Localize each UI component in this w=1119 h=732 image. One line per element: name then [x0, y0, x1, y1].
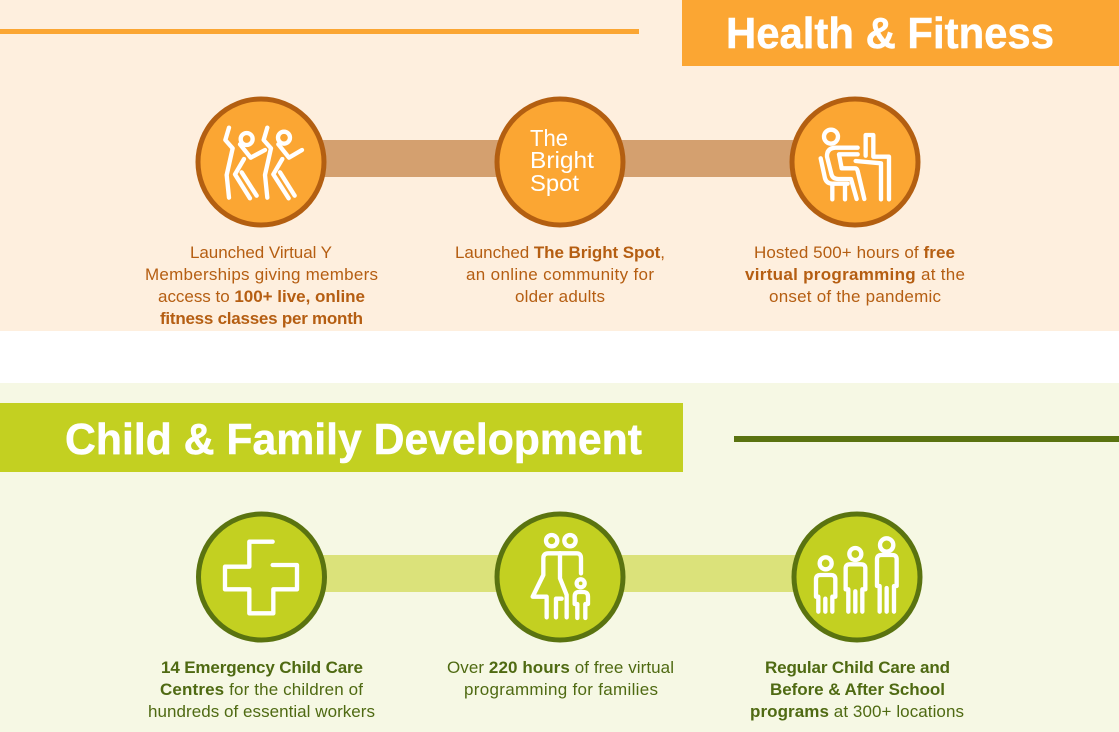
- text: regular child care: Before & After School: [770, 680, 945, 699]
- text: emergency child care centres: Centres for the children of: [160, 680, 363, 699]
- text: virtual programming hours: virtual programming at the: [745, 265, 965, 284]
- text: emergency child care centres: hundreds of essential workers: [148, 702, 375, 721]
- icon: the bright spot logo: The: [530, 125, 568, 151]
- icon: the bright spot logo: Bright: [530, 147, 595, 173]
- icon: medical cross: [198, 514, 324, 640]
- icon: dancers: [198, 99, 324, 225]
- text: regular child care: [750, 658, 964, 721]
- heading: child and family development: Child & Family Development: [65, 415, 642, 464]
- connector bar: [320, 555, 800, 592]
- text: emergency child care centres: [148, 658, 375, 721]
- panel: health and fitness: [0, 0, 1119, 331]
- text: virtual y memberships: [145, 243, 378, 328]
- text: virtual y memberships: Memberships giving members: [145, 265, 378, 284]
- text: the bright spot: an online community for: [466, 265, 654, 284]
- connector bar: [320, 140, 800, 177]
- icon: three people: [794, 514, 920, 640]
- text: virtual y memberships: fitness classes per month: [160, 309, 363, 328]
- icon: family: [497, 514, 623, 640]
- icon: the bright spot logo: [497, 99, 623, 225]
- heading: child and family development: [0, 403, 683, 472]
- text: the bright spot: [455, 243, 665, 306]
- text: virtual y memberships: Launched Virtual Y: [190, 243, 332, 262]
- heading: health and fitness: [682, 0, 1119, 66]
- text: the bright spot: older adults: [515, 287, 605, 306]
- heading: health and fitness: Health & Fitness: [726, 9, 1054, 58]
- text: virtual programming hours: Hosted 500+ hours of free: [754, 243, 955, 262]
- text: programming for families: [447, 658, 674, 699]
- text: virtual programming hours: onset of the pandemic: [769, 287, 942, 306]
- text: emergency child care centres: 14 Emergency Child Care: [161, 658, 363, 677]
- text: regular child care: programs at 300+ locations: [750, 702, 964, 721]
- text: the bright spot: Launched The Bright Spot,: [455, 243, 665, 262]
- text: programming for families: Over 220 hours of free virtual: [447, 658, 674, 677]
- text: virtual y memberships: access to 100+ live, online: [158, 287, 365, 306]
- panel: child and family development: [0, 383, 1119, 732]
- text: programming for families: programming for families: [464, 680, 658, 699]
- icon: person at desk: [792, 99, 918, 225]
- text: virtual programming hours: [745, 243, 965, 306]
- icon: the bright spot logo: Spot: [530, 170, 580, 196]
- text: regular child care: Regular Child Care and: [765, 658, 950, 677]
